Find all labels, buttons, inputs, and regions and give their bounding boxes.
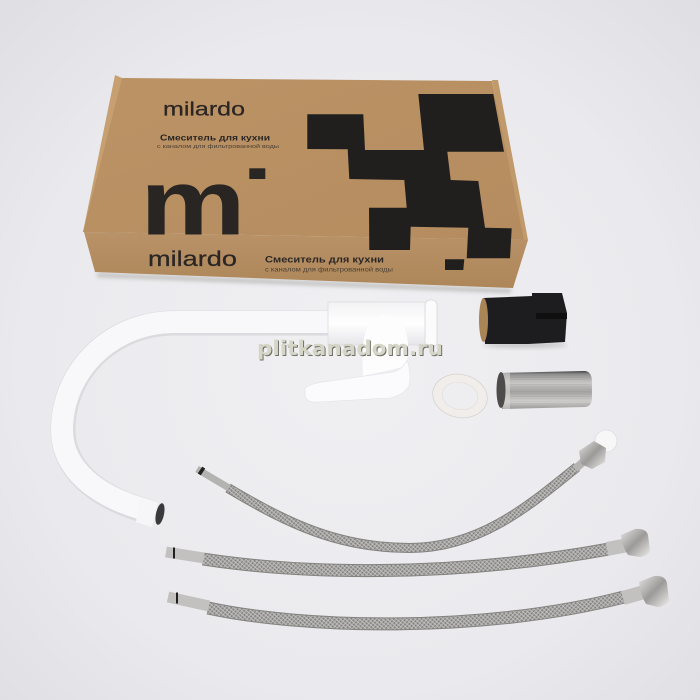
front subtitle: с каналом для фильтрованной воды	[265, 266, 393, 274]
box shadow	[97, 273, 512, 293]
hose 1 right fitting	[575, 456, 590, 469]
hose 2 left fitting	[166, 552, 204, 558]
watermark: plitkanadom.ru	[258, 337, 444, 361]
hose 2 right fitting	[607, 545, 628, 549]
hose 1 braid	[228, 467, 577, 548]
adapter brass opening	[479, 298, 488, 342]
hose 1 left fitting	[197, 469, 229, 488]
box right flap	[492, 80, 528, 240]
adapter ridge	[536, 313, 567, 319]
washer	[429, 369, 491, 423]
lid title: Смеситель для кухни	[160, 134, 270, 142]
box left flap	[83, 75, 122, 232]
hose 2 nut	[621, 529, 650, 557]
tube opening	[496, 372, 506, 408]
box front	[84, 232, 528, 288]
spout tip	[136, 497, 166, 527]
hose 2 braid	[203, 549, 609, 571]
hose 3 right fitting	[623, 592, 644, 598]
black pixel pattern	[307, 94, 512, 270]
faucet	[62, 300, 444, 527]
box	[83, 75, 528, 293]
hose 3 braid	[208, 597, 624, 624]
adapter shadow	[483, 342, 567, 348]
box lid	[83, 78, 524, 240]
handle lever	[305, 360, 410, 402]
spout	[62, 322, 330, 512]
watermark: plitkanadom.ru	[257, 336, 443, 360]
large m logo: m	[140, 150, 246, 255]
hose 1 plastic cap	[595, 430, 617, 452]
hose 1 nut	[579, 441, 606, 469]
faucet body	[328, 302, 427, 345]
hose 3 left fitting	[168, 597, 209, 606]
lid subtitle: с каналом для фильтрованной воды	[157, 143, 279, 150]
tube collar	[503, 373, 510, 409]
logo square	[249, 168, 265, 179]
front wordmark: milardo	[148, 248, 237, 271]
black adapter	[479, 293, 567, 348]
adapter body	[483, 293, 567, 344]
lid wordmark: milardo	[163, 100, 245, 120]
threaded tube	[496, 371, 592, 409]
front title: Смеситель для кухни	[265, 254, 384, 264]
hose 3	[168, 576, 669, 624]
hose 3 nut	[639, 576, 669, 607]
handle dome	[362, 315, 408, 376]
faucet flange	[425, 300, 437, 347]
hose 2	[166, 529, 650, 571]
hose 1	[197, 430, 617, 548]
